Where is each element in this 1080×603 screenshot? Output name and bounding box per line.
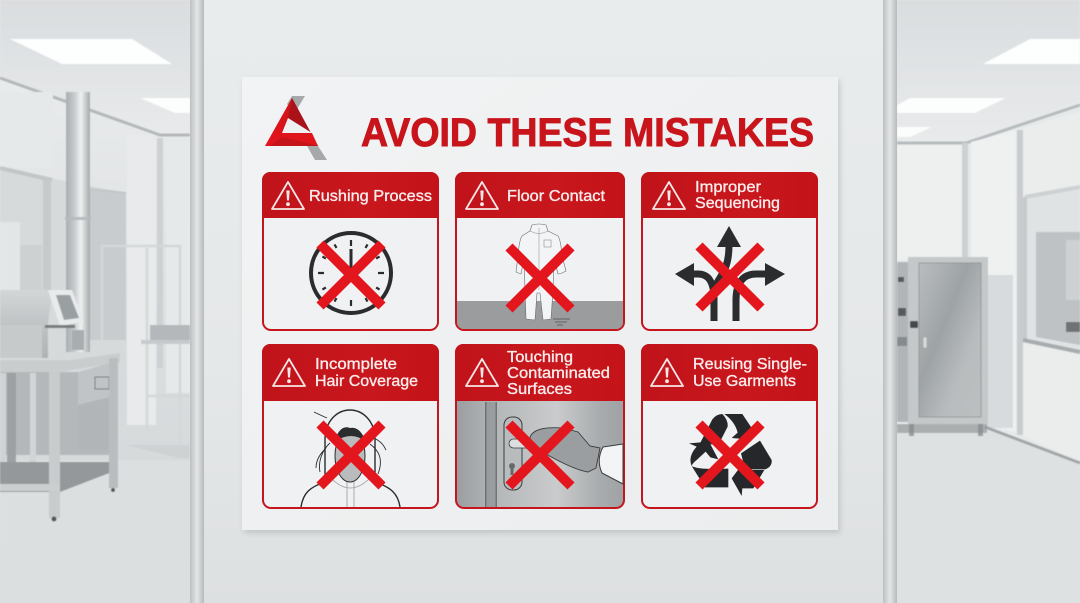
panel: touching contaminated surfaces <box>455 344 625 508</box>
panel header: Use Garments <box>693 373 796 390</box>
panel header: Improper <box>695 179 762 196</box>
panel: reusing single-use garments <box>641 344 818 508</box>
right cleanroom scene <box>897 0 1080 603</box>
panel: floor contact <box>455 172 625 330</box>
panel header: Incomplete <box>315 356 397 373</box>
title: AVOID THESE MISTAKES <box>361 111 814 155</box>
panel: incomplete hair coverage <box>262 344 439 508</box>
panel header: Sequencing <box>695 195 780 212</box>
left cleanroom scene <box>0 0 190 603</box>
panel: rushing process <box>262 172 439 330</box>
panel header <box>641 344 818 401</box>
icon: clock <box>311 233 391 313</box>
panel header: Hair Coverage <box>315 373 418 390</box>
icon: coverall on floor <box>509 224 571 325</box>
panel header: Surfaces <box>507 381 572 398</box>
panel header <box>455 172 625 218</box>
icon: gloved hand on door handle <box>486 402 623 507</box>
cabinet <box>897 262 909 422</box>
icon: diverging arrows <box>675 226 785 321</box>
glass enclosure in scene <box>102 246 190 457</box>
poster board <box>242 77 840 533</box>
panel: improper sequencing <box>641 172 818 330</box>
panel header: Touching <box>507 349 573 366</box>
machine <box>0 290 52 358</box>
panel header: Rushing Process <box>309 188 432 205</box>
panel header: Floor Contact <box>507 188 606 205</box>
panel header <box>455 344 625 401</box>
panel header <box>262 172 439 218</box>
panel header <box>641 172 818 218</box>
panel header: Reusing Single- <box>693 356 807 373</box>
icon: recycling symbol <box>689 414 772 496</box>
panel header: Contaminated <box>507 365 610 382</box>
icon: head with hood and loose hair <box>301 410 400 507</box>
wall columns <box>190 0 897 603</box>
logo <box>265 96 327 160</box>
panel header <box>262 344 439 401</box>
